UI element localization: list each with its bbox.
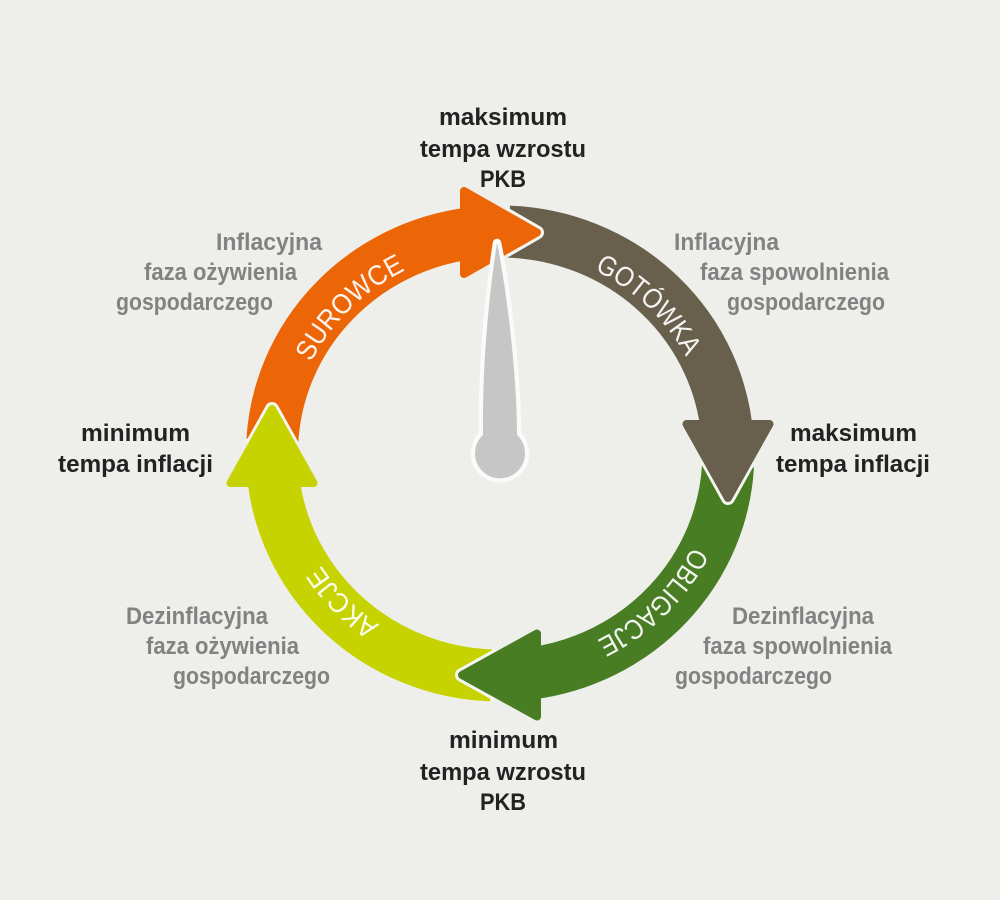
needle gauge <box>475 243 525 478</box>
label: minimum tempa inflacji <box>58 420 213 478</box>
label: maksimum tempa wzrostu PKB: maksimum <box>439 104 567 131</box>
label: dezinflacyjna faza spowolnienia: faza spowolnienia <box>703 633 892 660</box>
label: inflacyjna faza ozywienia: Inflacyjna <box>216 229 322 256</box>
label: inflacyjna faza spowolnienia: faza spowolnienia <box>700 259 889 286</box>
label: inflacyjna faza spowolnienia: gospodarczego <box>727 289 885 316</box>
label: dezinflacyjna faza ozywienia <box>126 603 330 690</box>
arc: surowce <box>272 233 470 440</box>
label: minimum tempa inflacji: tempa inflacji <box>58 451 213 478</box>
arrowhead: obligacje <box>462 634 537 716</box>
label: maksimum tempa wzrostu PKB: PKB <box>480 166 526 193</box>
label: minimum tempa inflacji: minimum <box>81 420 190 447</box>
ring label: AKCJE: AKCJE <box>306 566 380 636</box>
arrowhead: akcje <box>230 409 314 483</box>
label: inflacyjna faza spowolnienia <box>674 229 889 316</box>
label: dezinflacyjna faza ozywienia: faza ożywienia <box>146 633 299 660</box>
label: dezinflacyjna faza spowolnienia <box>675 603 892 690</box>
arrowhead: gotowka <box>686 424 770 498</box>
arrowhead: surowce <box>464 191 537 274</box>
label: minimum tempa wzrostu PKB: minimum <box>449 727 558 754</box>
ring label: GOTÓWKA: GOTÓWKA <box>598 256 700 357</box>
label: minimum tempa wzrostu PKB: tempa wzrostu <box>420 759 586 786</box>
label: dezinflacyjna faza spowolnienia: gospodarczego <box>675 663 832 690</box>
label: inflacyjna faza spowolnienia: Inflacyjna <box>674 229 779 256</box>
ring label: OBLIGACJE: OBLIGACJE <box>598 550 706 657</box>
label: minimum tempa wzrostu PKB: PKB <box>480 789 526 816</box>
label: dezinflacyjna faza spowolnienia: Dezinflacyjna <box>732 603 874 630</box>
label: inflacyjna faza ozywienia: gospodarczego <box>116 289 273 316</box>
label: inflacyjna faza ozywienia: faza ożywienia <box>144 259 297 286</box>
ring label: SUROWCE: SUROWCE <box>296 254 404 360</box>
arc: obligacje <box>530 466 728 674</box>
label: dezinflacyjna faza ozywienia: gospodarczego <box>173 663 330 690</box>
label: maksimum tempa inflacji <box>776 420 930 478</box>
label: maksimum tempa wzrostu PKB: tempa wzrostu <box>420 136 586 163</box>
label: maksimum tempa wzrostu PKB <box>420 104 586 193</box>
cycle ring <box>230 191 770 716</box>
arc: gotowka <box>509 232 728 440</box>
label: minimum tempa wzrostu PKB <box>420 727 586 816</box>
label: inflacyjna faza ozywienia <box>116 229 322 316</box>
arc: akcje <box>273 470 491 675</box>
label: dezinflacyjna faza ozywienia: Dezinflacyjna <box>126 603 268 630</box>
label: maksimum tempa inflacji: maksimum <box>790 420 917 447</box>
label: maksimum tempa inflacji: tempa inflacji <box>776 451 930 478</box>
